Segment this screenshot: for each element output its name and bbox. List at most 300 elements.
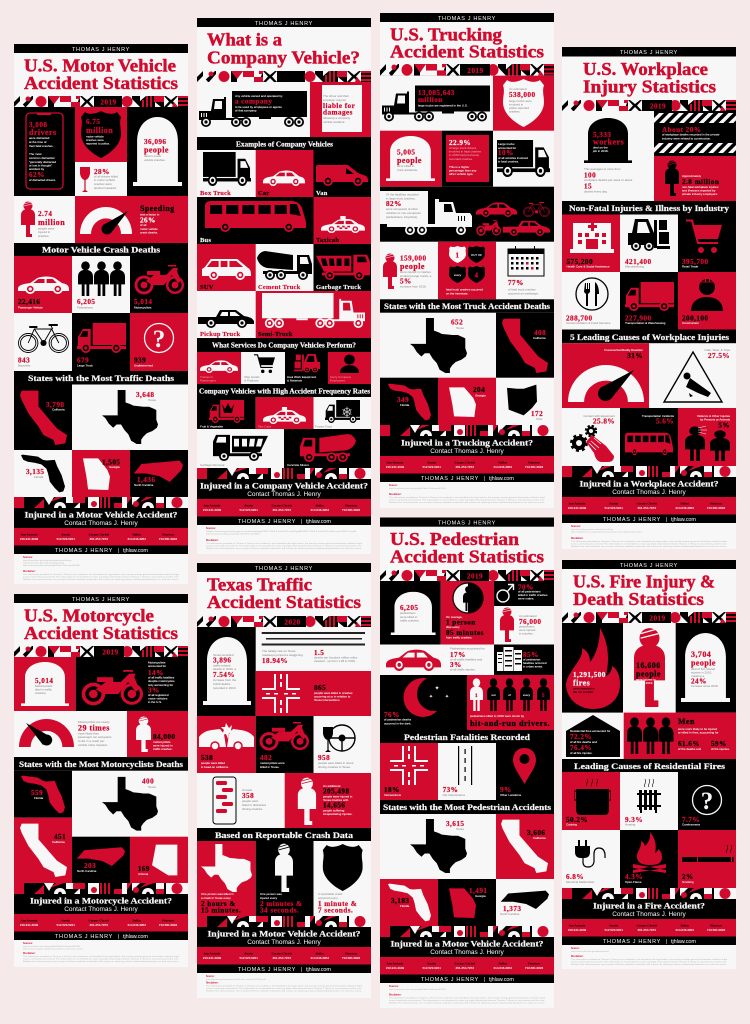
- cell: heating: 9.3%: [625, 816, 643, 824]
- footer: contact: THOMAS J HENRY: [603, 517, 661, 523]
- stat: tombstone: [380, 131, 442, 187]
- stat: residential house: [566, 715, 620, 757]
- cell: open flame: 4.3%: [625, 873, 643, 881]
- cell: taxicab: Taxicab: [316, 237, 339, 244]
- stat: construction hazard: [654, 111, 736, 156]
- footer: contact: [380, 425, 554, 504]
- stat: car 17 percent: 17%: [450, 651, 466, 659]
- heading: examples: Examples of Company Vehicles: [236, 142, 333, 148]
- stat: registered trucks: million: [418, 96, 443, 104]
- footer: contact: Disclaimer:: [389, 994, 402, 996]
- stat: speeding gauge: [75, 196, 188, 243]
- stat: interstate shields: 4: [474, 272, 479, 280]
- panel: U.S. Motorcycle Accident Statistics: 2019: [102, 648, 119, 656]
- stat: workers tombstone: 100: [584, 172, 596, 180]
- cell: passenger vehicle: [14, 256, 72, 313]
- footer: contact: Austin: [427, 460, 436, 464]
- callout: liable for damages: [310, 82, 371, 137]
- footer: contact: Disclaimer:: [571, 538, 584, 540]
- stat: tombstone: truck accidents.: [397, 168, 418, 172]
- cell: van: [314, 150, 371, 197]
- cell: open flame: Open Flame: [625, 880, 642, 884]
- stat: motorcycle: in the U.S.: [148, 700, 162, 704]
- footer: contact: San Antonio: [21, 918, 38, 922]
- map: Arizona: [130, 837, 188, 883]
- heading: crash deaths: Motor Vehicle Crash Deaths: [42, 246, 160, 255]
- footer: contact: Injured in a Motor Vehicle Accident?: [208, 930, 360, 938]
- footer: contact: San Antonio: [204, 504, 221, 508]
- footer: contact: Source:: [206, 976, 215, 978]
- footer: contact: Dallas: [680, 502, 690, 506]
- stat: injured: incapacitating injuries.: [323, 812, 353, 816]
- footer: contact: |: [301, 519, 303, 525]
- stat: tombstone: [14, 657, 76, 711]
- stat: tombstone: 5,014: [35, 677, 53, 685]
- stat: workers tombstone: [584, 118, 632, 194]
- stat: interstate shields: [438, 242, 496, 299]
- map: Ohio: [507, 385, 543, 421]
- service: haul equipment: & Materials: [287, 378, 303, 382]
- footer: contact: [380, 926, 554, 1004]
- cause: contact with equipment: Contact with Equipment: [583, 414, 615, 418]
- stat: hit-and-run: hit-and-run drivers.: [470, 719, 550, 728]
- footer: contact: THOMAS J HENRY: [238, 967, 296, 973]
- stat: tombstone: were killed in: [397, 164, 415, 168]
- stat: tombstone: traffic crashes.: [400, 618, 420, 622]
- stat: injured: [383, 254, 432, 289]
- footer: contact: issues commonly encountered. This information is not intended to create any legal relationship between Thomas J. Henry or any attorney and the user.: [389, 498, 545, 502]
- map: California: 408: [534, 329, 546, 337]
- stat: alcohol wine glass: crashes were: [94, 182, 112, 186]
- panel: U.S. Pedestrian Accident Statistics: 2019: [467, 572, 483, 580]
- map: California: 3,798: [46, 401, 64, 409]
- map: California: 451: [54, 833, 66, 841]
- footer: contact: THOMAS J HENRY: [55, 548, 113, 554]
- footer: contact: Injured in a Motor Vehicle Accident?: [24, 510, 178, 520]
- stat: note 22.9 percent: in 2019 had previously: [449, 153, 480, 157]
- stat: residential house: 76.4%: [570, 744, 592, 752]
- map: Georgia: 1,505: [102, 458, 120, 466]
- cell: health care: 575,200: [566, 258, 593, 266]
- stat: 82 percent occupants: in large truck crashes,: [386, 196, 416, 200]
- cell: motorcyclists: 5,014: [134, 298, 152, 306]
- cell: frozen food: ❄: [341, 404, 353, 420]
- footer: contact: The information provided on Thomas J. Henry Law's website is not intended to be legal advice, but merely conveys general information related to legal: [389, 996, 546, 1000]
- cell: undetermined: ?: [153, 326, 165, 353]
- stat: hit-and-run: of: [508, 693, 511, 697]
- cell: garbage truck: Garbage Truck: [316, 284, 361, 291]
- heading: causes: [562, 330, 736, 343]
- footer: contact: Source:: [571, 948, 580, 950]
- footer: contact: 713.581.0823: [525, 966, 544, 970]
- title: U.S. Pedestrian: [390, 529, 519, 549]
- cell: garbage removal: Garbage Removal: [200, 463, 225, 467]
- stat: injured every: [256, 841, 314, 916]
- cell: intersections: [380, 743, 438, 800]
- stat: tombstone: died in traffic: [35, 688, 52, 692]
- stat: distracted drivers phone: at the time of: [29, 140, 47, 144]
- footer: contact: Houston: [528, 962, 540, 966]
- footer: contact: 713.581.0823: [342, 508, 361, 512]
- stat: injured: people: [636, 670, 661, 678]
- service: ship goods: [244, 355, 275, 382]
- stat: male 70 percent: [494, 581, 554, 606]
- stat: truck 10 percent: [497, 140, 550, 177]
- stat: drunk driving: 958: [318, 754, 330, 762]
- stat: 2.8 million: and illnesses reported by: [682, 188, 716, 192]
- footer: contact: Neither the transmission nor receipt of these website materials will create an attorney-client relationship between us and our users.: [571, 545, 728, 548]
- stat: shield: large trucks were: [509, 99, 532, 103]
- stat: residential house: of all fire injuries.: [570, 751, 593, 755]
- stat: reportable crash: [318, 844, 363, 915]
- heading: states: [14, 757, 188, 771]
- stat: car 17 percent: 3%: [450, 661, 462, 669]
- map: North Carolina: [130, 450, 188, 497]
- cause: falls triangle: 27.5%: [708, 352, 730, 360]
- stat: injured every: 34 seconds.: [260, 907, 299, 915]
- title: [573, 571, 715, 609]
- stat: calendar: 77%: [508, 279, 524, 287]
- footer: contact: 512.520.0221: [57, 923, 75, 927]
- stat: tombstone: traffic-related: [213, 664, 231, 668]
- cause: contact with equipment: 25.8%: [593, 418, 615, 426]
- panel: U.S. Workplace Injury Statistics: 2019: [650, 102, 666, 110]
- stat: men: Men: [678, 717, 695, 726]
- footer: contact: |: [666, 517, 668, 523]
- stat: calendar: [508, 246, 544, 296]
- footer: contact: |: [666, 939, 668, 945]
- stat: truck 10 percent: 10%: [498, 149, 514, 157]
- stat: distracted phone: people were: [242, 799, 259, 803]
- stat: workers tombstone: This averages to more than: [584, 167, 621, 171]
- stat: head-on collisions: 538: [201, 754, 213, 762]
- cell: concrete mixers: [284, 429, 371, 468]
- footer: contact: San Antonio: [21, 532, 38, 536]
- footer: contact: Houston: [162, 918, 174, 922]
- map: California: California: [533, 336, 546, 340]
- footer: contact: 713.581.0823: [342, 956, 361, 960]
- cell: bicyclists: Bicyclists: [18, 364, 31, 368]
- footer: contact: Injured in a Workplace Accident?: [580, 480, 718, 488]
- stat: tombstone: injuries in 2019,: [691, 670, 712, 674]
- service: carry employees: Carry Company: [330, 375, 352, 379]
- cell: bicyclists: 843: [18, 356, 30, 364]
- stat: tombstone: Motorcyclists: [35, 684, 53, 688]
- footer: contact: |: [118, 934, 120, 940]
- footer: contact: Injured in a Company Vehicle Accident?: [200, 482, 368, 490]
- footer: contact: |: [301, 967, 303, 973]
- cell: retail: Retail Trade: [682, 265, 699, 269]
- stat: tombstone: 6,205: [400, 604, 418, 612]
- stat: dark 76 percent: 76%: [384, 711, 400, 719]
- panel: U.S. Trucking Accident Statistics: [380, 13, 554, 508]
- footer: contact: THOMAS J HENRY: [421, 977, 479, 983]
- map: Florida: Florida: [34, 796, 44, 800]
- map: Texas: [410, 819, 467, 873]
- cell: undetermined: [130, 313, 188, 371]
- footer: contact: 713.581.0823: [707, 506, 726, 510]
- map: Georgia: 1,491: [469, 887, 487, 895]
- stat: workers tombstone: 15: [584, 182, 592, 190]
- stat: note 22.9 percent: [442, 131, 493, 187]
- cell: car: Car: [258, 190, 269, 197]
- panel: U.S. Motorcycle Accident Statistics: THOMAS J HENRY: [72, 597, 130, 603]
- title: [583, 59, 716, 96]
- stat: hit-and-run: [467, 675, 554, 730]
- title: [390, 25, 544, 61]
- map: Texas: Texas: [456, 326, 464, 330]
- definition: semi truck: to be used by employees or agents: [235, 105, 282, 109]
- stat: workers tombstone: 5,333: [593, 131, 611, 139]
- footer: contact: Contact Thomas J. Henry: [247, 491, 322, 498]
- footer: contact: Corpus Christi: [636, 502, 657, 506]
- footer: contact: Austin: [61, 918, 70, 922]
- stat: tombstone deaths: [127, 107, 188, 196]
- cell: health care: Health Care & Social Assistance: [566, 265, 610, 269]
- stat: tombstone: pedestrians: [400, 611, 416, 615]
- map: Florida: Florida: [400, 904, 410, 908]
- cell: manufacturing: Manufacturing: [625, 265, 644, 269]
- stat: urban 85 percent: [494, 644, 554, 675]
- stat: tombstone: marking a: [691, 674, 705, 678]
- cause: transportation: 5.6%: [656, 418, 674, 426]
- cell: taxi cabs: Taxi Cabs: [258, 424, 272, 428]
- footer: contact: Houston: [528, 460, 540, 464]
- stat: alcohol wine glass: 28%: [94, 168, 110, 176]
- stat: tombstone: Texas recorded: [213, 653, 234, 657]
- footer: contact: issues commonly encountered. This information is not intended to create any legal relationship between Thomas J. Henry or any attorney and the user.: [571, 542, 727, 546]
- cell: smoking: Smoking: [682, 880, 694, 884]
- stat: injured person: 2.74: [38, 210, 52, 218]
- stat: gauge 29 times: to die in a crash per: [78, 739, 104, 743]
- stat: dark 76 percent: ✦: [445, 694, 449, 700]
- footer: contact: [14, 497, 188, 581]
- cause: contact with equipment: [572, 414, 615, 462]
- service: carry employees: Employees: [330, 378, 345, 382]
- stat: interstate shields: on the interstate.: [446, 292, 469, 296]
- stat: injured: people suffering: [323, 808, 345, 812]
- footer: contact: Contact Thomas J. Henry: [64, 906, 139, 913]
- stat: dark 76 percent: ✦: [434, 685, 440, 692]
- footer: contact: The information provided on Thomas J. Henry Law's website is not intended to be legal advice, but merely conveys general information related to legal: [206, 984, 363, 988]
- cell: electrical: 6.8%: [566, 873, 584, 881]
- stat: intersections: 865: [314, 684, 326, 692]
- stat: road fatality rate: [262, 632, 365, 665]
- footer: contact: Dallas: [315, 952, 325, 956]
- cell: heating: [625, 779, 661, 827]
- cell: construction: 200,100: [682, 314, 709, 322]
- callout: liable for damages: following a company: [323, 116, 351, 120]
- stat: 82 percent occupants: were occupants of other: [386, 207, 418, 211]
- cell: fruit and vegetable: [197, 397, 256, 429]
- map: California: 3,606: [527, 829, 545, 837]
- map: Florida: 3,135: [26, 468, 44, 476]
- stat: workers tombstone: deaths every day.: [584, 190, 608, 194]
- heading: crash deaths: [14, 243, 188, 256]
- service: ship goods: & Products: [244, 378, 259, 382]
- footer: contact: The information provided on Thomas J. Henry Law's website is not intended to be legal advice, but merely conveys general information related to legal: [571, 958, 728, 961]
- panel: U.S. Trucking Accident Statistics: 2019: [467, 67, 484, 75]
- stat: registered trucks: [382, 86, 490, 122]
- stat: tombstone: increase since 2018.: [691, 684, 719, 688]
- footer: contact: San Antonio: [569, 924, 586, 928]
- cell: SUV: SUV: [200, 284, 214, 291]
- heading: examples: [197, 137, 371, 150]
- title: Accident Statistics: [24, 623, 178, 643]
- stat: injured: [500, 607, 541, 642]
- stat: flame fires: the US in 2019.: [573, 690, 594, 694]
- map: North Carolina: [72, 837, 130, 883]
- stat: injured: 205,498: [323, 788, 350, 796]
- cell: transportation: [620, 272, 678, 330]
- stat: male 70 percent: were males.: [518, 596, 534, 600]
- stat: injured: were injured in crashes: [400, 270, 431, 274]
- stat: tombstone: [197, 627, 256, 716]
- stat: men: were more likely to be injured: [678, 727, 717, 731]
- stat: residential house: Residential fires accounted for: [570, 729, 610, 733]
- footer: contact: tjhlaw.com: [671, 939, 696, 945]
- cell: food services: Accommodation & Food Services: [566, 321, 611, 325]
- stat: dark 76 percent: ✦: [429, 694, 433, 700]
- heading: states: [380, 800, 554, 814]
- stat: car 17 percent: [386, 647, 485, 672]
- footer: contact: Austin: [609, 502, 618, 506]
- cell: carelessness: ?: [701, 788, 713, 815]
- stat: reportable crash: 1 minute &: [318, 900, 357, 908]
- footer: contact: 512.520.0221: [605, 928, 623, 932]
- stat: men: or killed in fires, accounting for: [678, 730, 719, 734]
- footer: contact: tjhlaw.com: [489, 476, 514, 482]
- title: [207, 29, 360, 67]
- stat: distracted drivers phone: accident by: [29, 167, 45, 171]
- stat: injured: 16,600: [636, 661, 661, 670]
- stat: speeding gauge: 26%: [140, 216, 156, 224]
- map: Florida: Florida: [34, 475, 44, 479]
- stat: police shield: crashes were: [86, 138, 104, 142]
- stat: intersections: [256, 671, 371, 716]
- footer: contact: 512.520.0221: [423, 966, 441, 970]
- cause: violence: by Persons or Animals: [700, 418, 730, 422]
- footer: contact: 214.646.3953: [311, 508, 329, 512]
- footer: contact: Austin: [427, 962, 436, 966]
- stat: tombstone: deaths in 2020, a: [213, 667, 236, 671]
- stat: injured person: million: [38, 218, 65, 227]
- stat: men: of fire deaths and: [678, 747, 702, 751]
- footer: contact: issues commonly encountered. This information is not intended to create any legal relationship between Thomas J. Henry or any attorney and the user.: [23, 958, 179, 960]
- stat: tombstone deaths: 36,096: [144, 138, 166, 146]
- footer: contact: [14, 883, 188, 963]
- cell: carelessness: Carelessness: [682, 823, 701, 827]
- map: Georgia: [438, 378, 496, 425]
- map: Texas: 400: [142, 778, 154, 786]
- heading: fatalities recorded: [380, 730, 554, 743]
- footer: contact: Contact Thomas J. Henry: [430, 949, 505, 956]
- stat: construction hazard: About 20%: [662, 126, 701, 134]
- cell: manufacturing: 421,400: [625, 258, 652, 266]
- callout: liable for damages: The driver and their: [323, 94, 349, 98]
- cell: carelessness: [678, 772, 736, 830]
- stat: injured: An estimated: [519, 614, 537, 618]
- footer: contact: Dallas: [498, 460, 508, 464]
- panel: What is a Company Vehicle?: THOMAS J HENRY: [255, 21, 313, 27]
- footer: contact: [197, 916, 371, 992]
- heading: causes: 5 Leading Causes of Workplace Injuries: [570, 333, 729, 342]
- footer: contact: 214.646.3953: [494, 966, 512, 970]
- cell: intersections: Intersections: [384, 793, 402, 797]
- map: California: California: [52, 840, 65, 844]
- map: Texas: Texas: [148, 398, 156, 402]
- title: U.S. Workplace: [583, 59, 708, 79]
- cell: pedestrians: 6,205: [77, 298, 95, 306]
- footer: contact: Neither the transmission nor receipt of these website materials will create an attorney-client relationship between us and our users.: [23, 578, 180, 581]
- footer: contact: Houston: [710, 502, 722, 506]
- stat: motorcycle: Motorcyclists: [148, 660, 166, 664]
- title: U.S. Fire Injury &: [573, 571, 715, 591]
- footer: contact: 210.941.2939: [386, 465, 405, 469]
- footer: contact: Corpus Christi: [454, 460, 475, 464]
- map: Florida: [21, 455, 65, 492]
- stat: residential house: 72.2%: [570, 733, 592, 741]
- stat: note 22.9 percent: recorded crashes.: [449, 157, 473, 161]
- footer: contact: Neither the transmission nor receipt of these website materials will create an attorney-client relationship between us and our users.: [206, 990, 363, 992]
- stat: injured: 14,656: [323, 802, 345, 810]
- stat: 82 percent occupants: (pedestrians, bicyclists).: [386, 215, 418, 219]
- title: Accident Statistics: [207, 592, 361, 612]
- callout: liable for damages: liable for: [323, 102, 356, 110]
- footer: contact: 210.941.2939: [20, 923, 39, 927]
- service: transport passengers: [197, 352, 241, 384]
- stat: shield: 538,000: [509, 91, 536, 99]
- stat: injured: in crashes.: [519, 632, 534, 636]
- footer: contact: 361.254.7973: [638, 506, 656, 510]
- footer: contact: Corpus Christi: [88, 918, 109, 922]
- footer: contact: issues commonly encountered. This information is not intended to create any legal relationship between Thomas J. Henry or any attorney and the user.: [206, 987, 362, 990]
- stat: motorcycle: 3%: [148, 686, 160, 694]
- cell: large truck: [72, 313, 130, 371]
- footer: contact: tjhlaw.com: [671, 517, 696, 523]
- stat: injured: Texas crashes with: [323, 798, 349, 802]
- footer: contact: tjhlaw.com: [306, 967, 331, 973]
- footer: contact: San Antonio: [387, 962, 404, 966]
- title: Texas Traffic: [207, 575, 312, 595]
- stat: injured: people were injured in: [323, 794, 353, 798]
- footer: contact: Disclaimer:: [206, 982, 219, 984]
- cause: violence: 5%: [718, 422, 730, 430]
- stat: motorcyclists killed: motorcyclists were: [260, 761, 285, 765]
- footer: contact: Disclaimer:: [571, 956, 584, 958]
- title: Accident Statistics: [390, 546, 544, 566]
- callout: liable for damages: damages: [323, 108, 353, 116]
- footer: contact: https://www.nhtsa.gov/risky-driving/speeding: [23, 562, 65, 564]
- map: Florida: Florida: [400, 403, 410, 407]
- footer: contact: 214.646.3953: [128, 923, 146, 927]
- map: Texas: [410, 318, 467, 373]
- cell: transportation: 227,900: [625, 314, 652, 322]
- map: Texas: 652: [451, 318, 463, 326]
- stat: injured every: injured every: [260, 896, 278, 900]
- stat: motorcyclists killed: [256, 716, 314, 773]
- stat: note 22.9 percent: 22.9%: [449, 139, 471, 147]
- stat: killed every: [197, 841, 256, 916]
- stat: distracted drivers phone: or lost in thought": [29, 164, 52, 168]
- footer: contact: The information provided on Thomas J. Henry Law's website is not intended to be legal advice, but merely conveys general information related to legal: [571, 540, 728, 543]
- footer: contact: https://www.fmcsa.dot.gov/regulations/title49/section/390.5: [206, 532, 261, 536]
- stat: car 17 percent: of all traffic fatalities and: [450, 658, 482, 662]
- cause: falls triangle: Falls, Slips, & Trips: [704, 348, 730, 352]
- cell: cooking: 50.2%: [566, 816, 588, 824]
- stat: construction hazard: of workplace deaths recorded in the private: [662, 133, 720, 137]
- footer: contact: The information provided on Thomas J. Henry Law's website is not intended to be legal advice, but merely conveys general information related to legal: [389, 496, 546, 499]
